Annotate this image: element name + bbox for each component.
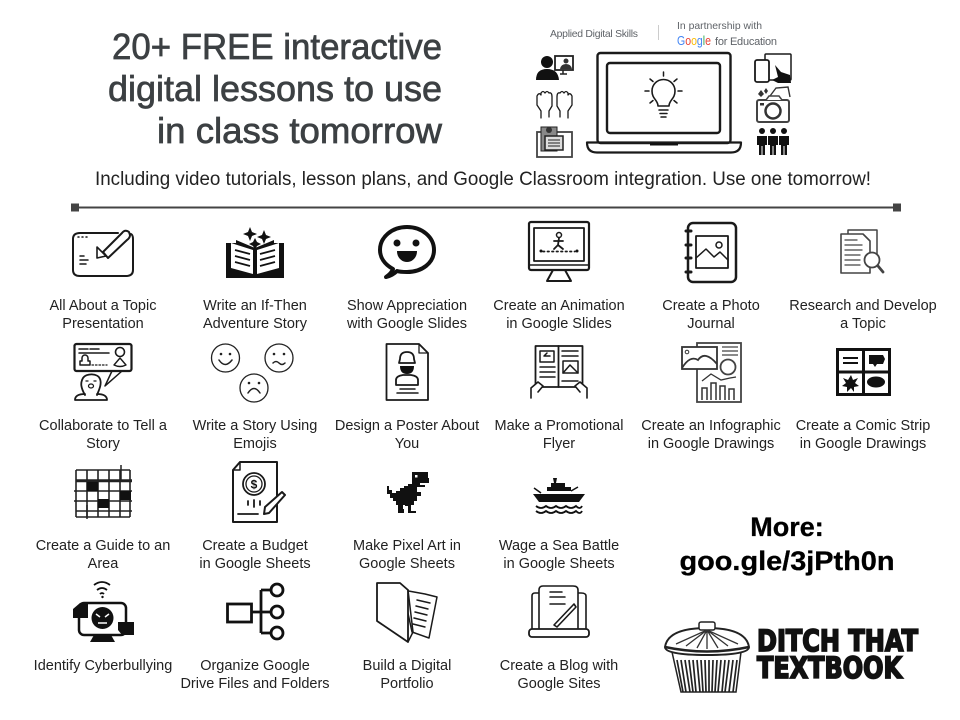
lesson: Write an If-Then Adventure Story <box>203 227 308 332</box>
icon: four comic panels <box>837 349 890 395</box>
icon: laptop with notepad and pencil <box>529 586 589 637</box>
label: Portfolio <box>380 676 434 692</box>
icon: profile poster <box>386 344 428 400</box>
lesson: Organize Google Drive Files and Folders <box>180 584 330 692</box>
icon: collage of papers <box>537 127 572 157</box>
icon: open folder with papers <box>377 583 437 642</box>
label: Emojis <box>233 436 277 452</box>
label: Make a Promotional <box>495 418 623 434</box>
lesson: Build a Digital Portfolio <box>363 583 451 692</box>
icon: file tree <box>228 584 283 639</box>
label: All About a Topic <box>50 298 156 314</box>
label: Organize Google <box>200 658 310 674</box>
icon: documents with magnifier <box>841 230 883 273</box>
lesson: All About a Topic Presentation <box>50 231 156 332</box>
icon: three emoji faces <box>212 344 293 402</box>
logos: applied digital skills and google for education: Google <box>677 33 711 48</box>
logos: applied digital skills and google for education: In partnership with <box>677 21 762 32</box>
label: a Topic <box>840 316 886 332</box>
lesson: Create a Guide to an Area <box>36 465 170 572</box>
icon: magic open book <box>226 227 284 278</box>
icon: camera with sparkles <box>757 87 790 122</box>
logo: trash can <box>665 622 749 692</box>
lesson: Create a Photo Journal <box>662 223 760 332</box>
icon: three people <box>757 128 789 155</box>
icon: budget document with pencil: $ <box>251 478 258 492</box>
label: Drive Files and Folders <box>180 676 330 692</box>
lesson: Research and Develop a Topic <box>789 230 937 332</box>
label: Collaborate to Tell a <box>39 418 168 434</box>
label: Flyer <box>543 436 575 452</box>
lesson: Write a Story Using Emojis <box>193 344 317 452</box>
call to action: more link: More: <box>750 512 824 542</box>
icon: smiling speech bubble <box>380 227 434 277</box>
label: Create a Budget <box>202 538 308 554</box>
label: Adventure Story <box>203 316 308 332</box>
label: You <box>395 436 419 452</box>
icon: map grid <box>74 465 132 519</box>
icon: raised hands <box>537 92 572 118</box>
lesson: Design a Poster About You <box>335 344 479 452</box>
lesson: Create a Budget in Google Sheets <box>199 462 311 572</box>
subtitle: Including video tutorials, lesson plans, and Google Classroom integration. Use one tomorrow! <box>95 169 871 190</box>
title: in class tomorrow <box>157 110 443 151</box>
label: Create a Blog with <box>500 658 618 674</box>
lesson: Wage a Sea Battle in Google Sheets <box>499 478 619 572</box>
label: Create a Comic Strip <box>796 418 930 434</box>
icon: phone, tablet and tapping hand <box>755 54 791 83</box>
icon: battleship on waves <box>533 478 585 513</box>
label: in Google Drawings <box>800 436 926 452</box>
label: Create a Photo <box>662 298 760 314</box>
label: Design a Poster About <box>335 418 479 434</box>
icon: hands holding flyer <box>531 346 587 398</box>
label: Google Sheets <box>359 556 455 572</box>
icon: spiral photo journal <box>686 223 736 282</box>
title: 20+ FREE interactive <box>112 26 442 67</box>
label: Create an Animation <box>493 298 625 314</box>
title: digital lessons to use <box>108 68 442 109</box>
label: Write an If-Then <box>203 298 307 314</box>
logos: applied digital skills and google for education: Applied Digital Skills <box>550 29 638 40</box>
icon: cyberbully monitor with wifi <box>73 582 134 642</box>
label: Journal <box>687 316 735 332</box>
label: in Google Sheets <box>503 556 615 572</box>
icon: presentation pencil <box>73 231 133 276</box>
lesson: Identify Cyberbullying <box>34 582 172 674</box>
hero: laptop with lightbulb <box>587 53 741 152</box>
lesson: Show Appreciation with Google Slides <box>346 227 467 332</box>
lesson: Make a Promotional Flyer <box>495 346 623 452</box>
lesson: Make Pixel Art in Google Sheets <box>353 472 461 572</box>
logo: ditch that textbook wordmark <box>757 624 918 685</box>
label: Google Sites <box>517 676 601 692</box>
title <box>108 26 443 151</box>
label: in Google Sheets <box>199 556 311 572</box>
label: Area <box>88 556 119 572</box>
lesson: Collaborate to Tell a Story <box>39 344 168 452</box>
label: Presentation <box>62 316 144 332</box>
logos: applied digital skills and google for education <box>550 21 777 48</box>
lesson: Create a Comic Strip in Google Drawings <box>796 349 930 452</box>
icon: monitor with running figure <box>529 222 589 281</box>
icon: video call person <box>536 56 573 80</box>
icon: pixel dinosaur <box>387 472 429 513</box>
icon: infographic sheet <box>682 343 741 402</box>
label: in Google Drawings <box>648 436 774 452</box>
label: Build a Digital <box>363 658 451 674</box>
lesson: Create an Infographic in Google Drawings <box>641 343 781 452</box>
label: with Google Slides <box>346 316 467 332</box>
label: Write a Story Using <box>193 418 317 434</box>
label: in Google Slides <box>506 316 612 332</box>
label: Identify Cyberbullying <box>34 658 172 674</box>
label: Show Appreciation <box>347 298 467 314</box>
logos: applied digital skills and google for education: for Education <box>715 36 777 48</box>
label: Create a Guide to an <box>36 538 170 554</box>
label: Wage a Sea Battle <box>499 538 619 554</box>
call to action: more link: goo.gle/3jPth0n <box>680 546 894 576</box>
label: Make Pixel Art in <box>353 538 461 554</box>
label: Story <box>86 436 121 452</box>
label: Create an Infographic <box>641 418 781 434</box>
label: Research and Develop <box>789 298 937 314</box>
logo: ditch that textbook wordmark: DITCH THAT <box>757 624 918 658</box>
logo: ditch that textbook wordmark: TEXTBOOK <box>757 651 903 685</box>
lesson: Create a Blog with Google Sites <box>500 586 618 692</box>
lesson: Create an Animation in Google Slides <box>493 222 625 332</box>
icon: storytelling bubble <box>74 344 132 400</box>
